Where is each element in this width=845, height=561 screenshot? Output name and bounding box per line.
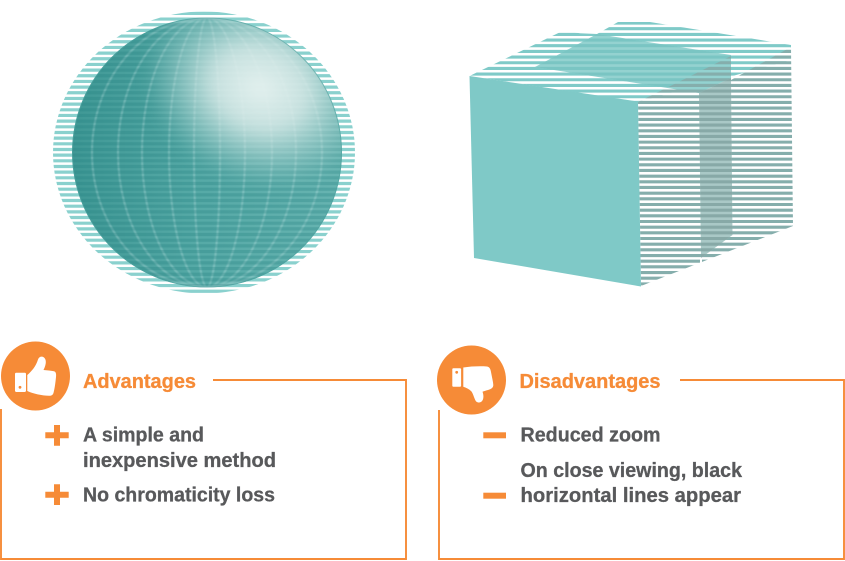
icon: thumbs up: [1, 342, 70, 410]
cube: solid front face: [470, 76, 641, 286]
advantage item 1: A simple and: [83, 424, 204, 446]
heading: Advantages: Advantages: [83, 371, 196, 393]
disadvantage item 1: Reduced zoom: [520, 424, 660, 446]
advantage item 1: [45, 424, 276, 472]
sphere illustration: [53, 12, 355, 293]
cube: white notch: [700, 258, 702, 278]
cube: translucent inner top face: [535, 36, 731, 93]
disadvantage item 2: [483, 459, 743, 507]
cube: striped right face: [638, 47, 793, 286]
sphere: outer striped ghost image: [53, 12, 355, 293]
advantage item 1: inexpensive method: [83, 449, 276, 472]
disadvantage item 2: horizontal lines appear: [520, 484, 741, 507]
disadvantage item 2: On close viewing, black: [520, 459, 743, 482]
heading: Disadvantages: Disadvantages: [520, 371, 660, 393]
cube: striped top face: [470, 22, 791, 102]
disadvantages frame: [439, 380, 844, 559]
panel: advantages: [1, 342, 406, 559]
advantages frame: [1, 380, 406, 559]
cube: translucent inner side face: [699, 78, 732, 258]
sphere: solid shaded globe: [72, 18, 342, 288]
icon: thumbs down: [437, 346, 506, 414]
panel: disadvantages: [437, 346, 844, 559]
advantage item 2: No chromaticity loss: [83, 484, 275, 506]
cube illustration: [465, 22, 796, 291]
